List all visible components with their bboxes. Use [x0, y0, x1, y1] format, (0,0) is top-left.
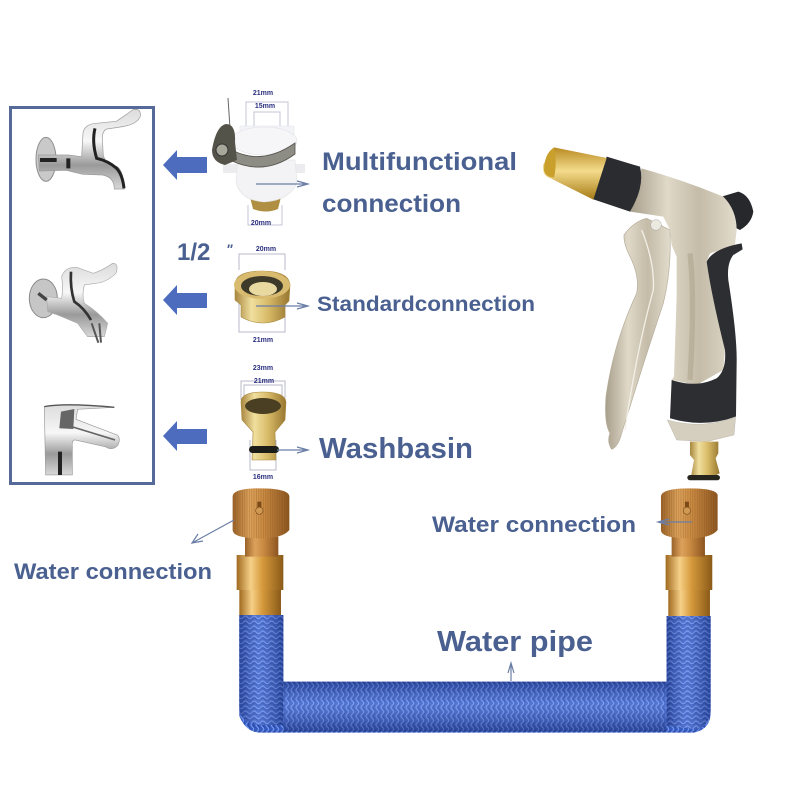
- black nozzle ring: [592, 157, 641, 212]
- collar: [667, 417, 736, 442]
- pointer: right water connection: [658, 519, 692, 525]
- pointer: washbasin: [277, 447, 308, 453]
- label: right Water connection: Water connection: [432, 512, 636, 537]
- label: inch mark: ": [226, 241, 233, 257]
- icon: washbasin brass connector: 21mm: [254, 378, 274, 385]
- icon: standard brass connector: 21mm: [253, 337, 273, 344]
- icon: multifunctional connector: [212, 90, 305, 227]
- pointer: standard: [256, 303, 308, 309]
- icon: washbasin mixer: [44, 405, 119, 475]
- pointer: water pipe: [508, 663, 514, 681]
- body shading: [690, 253, 692, 380]
- icon: wall faucet with lever: [36, 109, 140, 189]
- label: Washbasin: Washbasin: [319, 433, 473, 465]
- icon: washbasin brass connector: 23mm: [253, 365, 273, 372]
- arrow: middle left-pointing: [163, 285, 207, 315]
- rear knob: [722, 192, 753, 230]
- label: left Water connection: Water connection: [14, 559, 212, 584]
- icon: washbasin brass connector: 16mm: [253, 474, 273, 481]
- hose: blue expandable pipe: [239, 615, 711, 733]
- trigger pin: [651, 220, 661, 230]
- label: connection: connection: [322, 190, 461, 218]
- icon: standard brass connector: 20mm: [256, 246, 276, 253]
- arrow: top left-pointing: [163, 150, 207, 180]
- icon: multifunctional connector: 20mm: [251, 220, 271, 227]
- icon: spray gun: [543, 147, 753, 480]
- nozzle tip: [544, 147, 556, 177]
- panel: faucet frame: [10, 108, 154, 484]
- brass nozzle: [543, 147, 607, 200]
- quick connector: [690, 442, 720, 478]
- label: Water pipe: Water pipe: [437, 626, 593, 658]
- icon: standard brass connector: [234, 246, 290, 344]
- label: Standardconnection: Standardconnection: [317, 293, 535, 316]
- hose: left connector: [233, 488, 289, 615]
- icon: multifunctional connector: 15mm: [255, 103, 275, 110]
- trigger highlight: [625, 230, 654, 430]
- pointer: left water connection: [192, 520, 234, 543]
- body: [630, 168, 737, 385]
- icon: multifunctional connector: 21mm: [253, 90, 273, 97]
- icon: washbasin brass connector: [241, 365, 286, 481]
- icon: tap with hose nozzle: [29, 263, 117, 343]
- trigger lever: [605, 218, 670, 449]
- label: 1/2 inch: 1/2: [177, 239, 210, 266]
- arrow: bottom left-pointing: [163, 421, 207, 451]
- pointer: multifunctional: [256, 181, 308, 187]
- hose: right connector: [661, 488, 718, 616]
- grip rubber: [670, 243, 743, 423]
- label: Multifunctional: Multifunctional: [322, 148, 517, 176]
